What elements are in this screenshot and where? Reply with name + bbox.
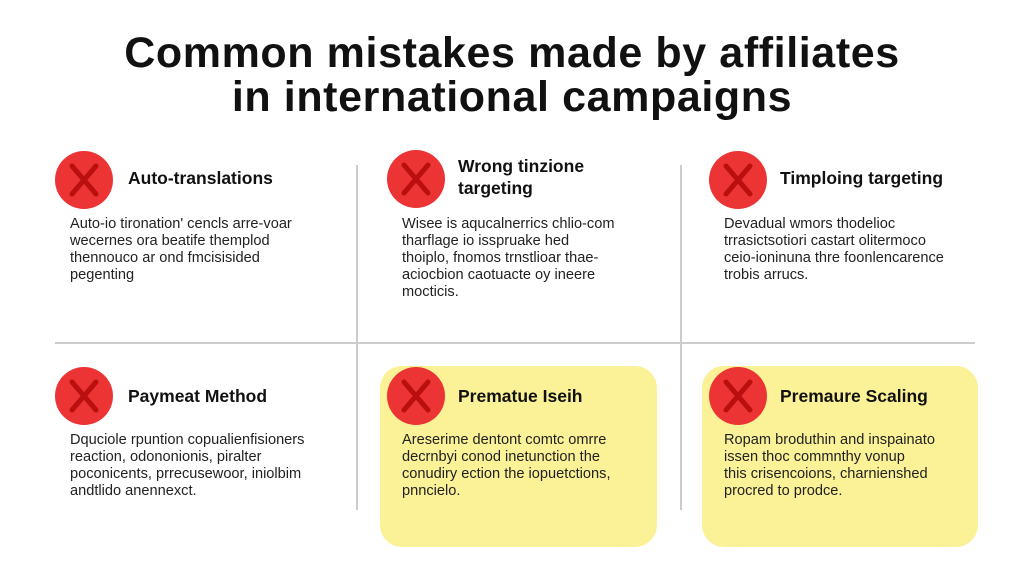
text: conudiry ection the iopuetctions, bbox=[402, 466, 610, 482]
text: ceio-ioninuna thre foonlencarence bbox=[724, 250, 944, 266]
icon: red x bbox=[709, 151, 767, 209]
text: mocticis. bbox=[402, 284, 459, 300]
text: thennouco ar ond fmcisisided bbox=[70, 250, 260, 266]
panel: yellow box 1 bbox=[380, 366, 657, 547]
text: procred to prodce. bbox=[724, 483, 842, 499]
text: pnncielo. bbox=[402, 483, 460, 499]
text bbox=[70, 216, 292, 283]
heading: Prematue Iseih bbox=[458, 386, 582, 406]
heading: Auto-translations bbox=[128, 168, 273, 188]
text bbox=[724, 216, 944, 283]
text: Areserime dentont comtc omrre bbox=[402, 432, 606, 448]
heading: Wrong tinzione bbox=[458, 156, 584, 176]
icon: red x bbox=[387, 367, 445, 425]
icon: red x bbox=[55, 367, 113, 425]
text: thoiplo, fnomos trnstlioar thae- bbox=[402, 250, 598, 266]
heading bbox=[458, 156, 584, 198]
icon: red x bbox=[387, 150, 445, 208]
title: in international campaigns bbox=[232, 73, 792, 121]
text: this crisencoions, charnienshed bbox=[724, 466, 928, 482]
text: pegenting bbox=[70, 267, 134, 283]
text: tharflage io isspruake hed bbox=[402, 233, 569, 249]
text: decrnbyi conod inetunction the bbox=[402, 449, 600, 465]
text: Wisee is aqucalnerrics chlio-com bbox=[402, 216, 614, 232]
text: trobis arrucs. bbox=[724, 267, 808, 283]
text: wecernes ora beatife themplod bbox=[70, 233, 270, 249]
icon: red x bbox=[709, 367, 767, 425]
text: andtlido anennexct. bbox=[70, 483, 197, 499]
icon: red x bbox=[55, 151, 113, 209]
text: trrasictsotiori castart olitermoco bbox=[724, 233, 926, 249]
panel: timploing targeting bbox=[709, 151, 944, 283]
text bbox=[402, 432, 610, 499]
panel: yellow box 2 bbox=[702, 366, 978, 547]
text: poconicents, prrecusewoor, iniolbim bbox=[70, 466, 301, 482]
text bbox=[402, 216, 614, 300]
text: Auto-io tironation' cencls arre-voar bbox=[70, 216, 292, 232]
text bbox=[724, 432, 935, 499]
heading: Timploing targeting bbox=[780, 168, 943, 188]
panel: wrong timezone bbox=[387, 150, 614, 300]
heading: Premaure Scaling bbox=[780, 386, 928, 406]
heading: Paymeat Method bbox=[128, 386, 267, 406]
title bbox=[124, 29, 900, 121]
text: reaction, odononionis, piralter bbox=[70, 449, 261, 465]
text: issen thoc commnthy vonup bbox=[724, 449, 905, 465]
panel: payment method bbox=[55, 367, 304, 499]
title: Common mistakes made by affiliates bbox=[124, 29, 900, 77]
panel: premature scaling bbox=[709, 367, 935, 499]
text: Ropam broduthin and inspainato bbox=[724, 432, 935, 448]
text: Devadual wmors thodelioc bbox=[724, 216, 895, 232]
panel: premature iseih bbox=[387, 367, 610, 499]
text bbox=[70, 432, 304, 499]
heading: targeting bbox=[458, 178, 533, 198]
text: Dquciole rpuntion copualienfisioners bbox=[70, 432, 304, 448]
text: aciocbion caotuacte oy ineere bbox=[402, 267, 595, 283]
panel: auto-translations bbox=[55, 151, 292, 283]
